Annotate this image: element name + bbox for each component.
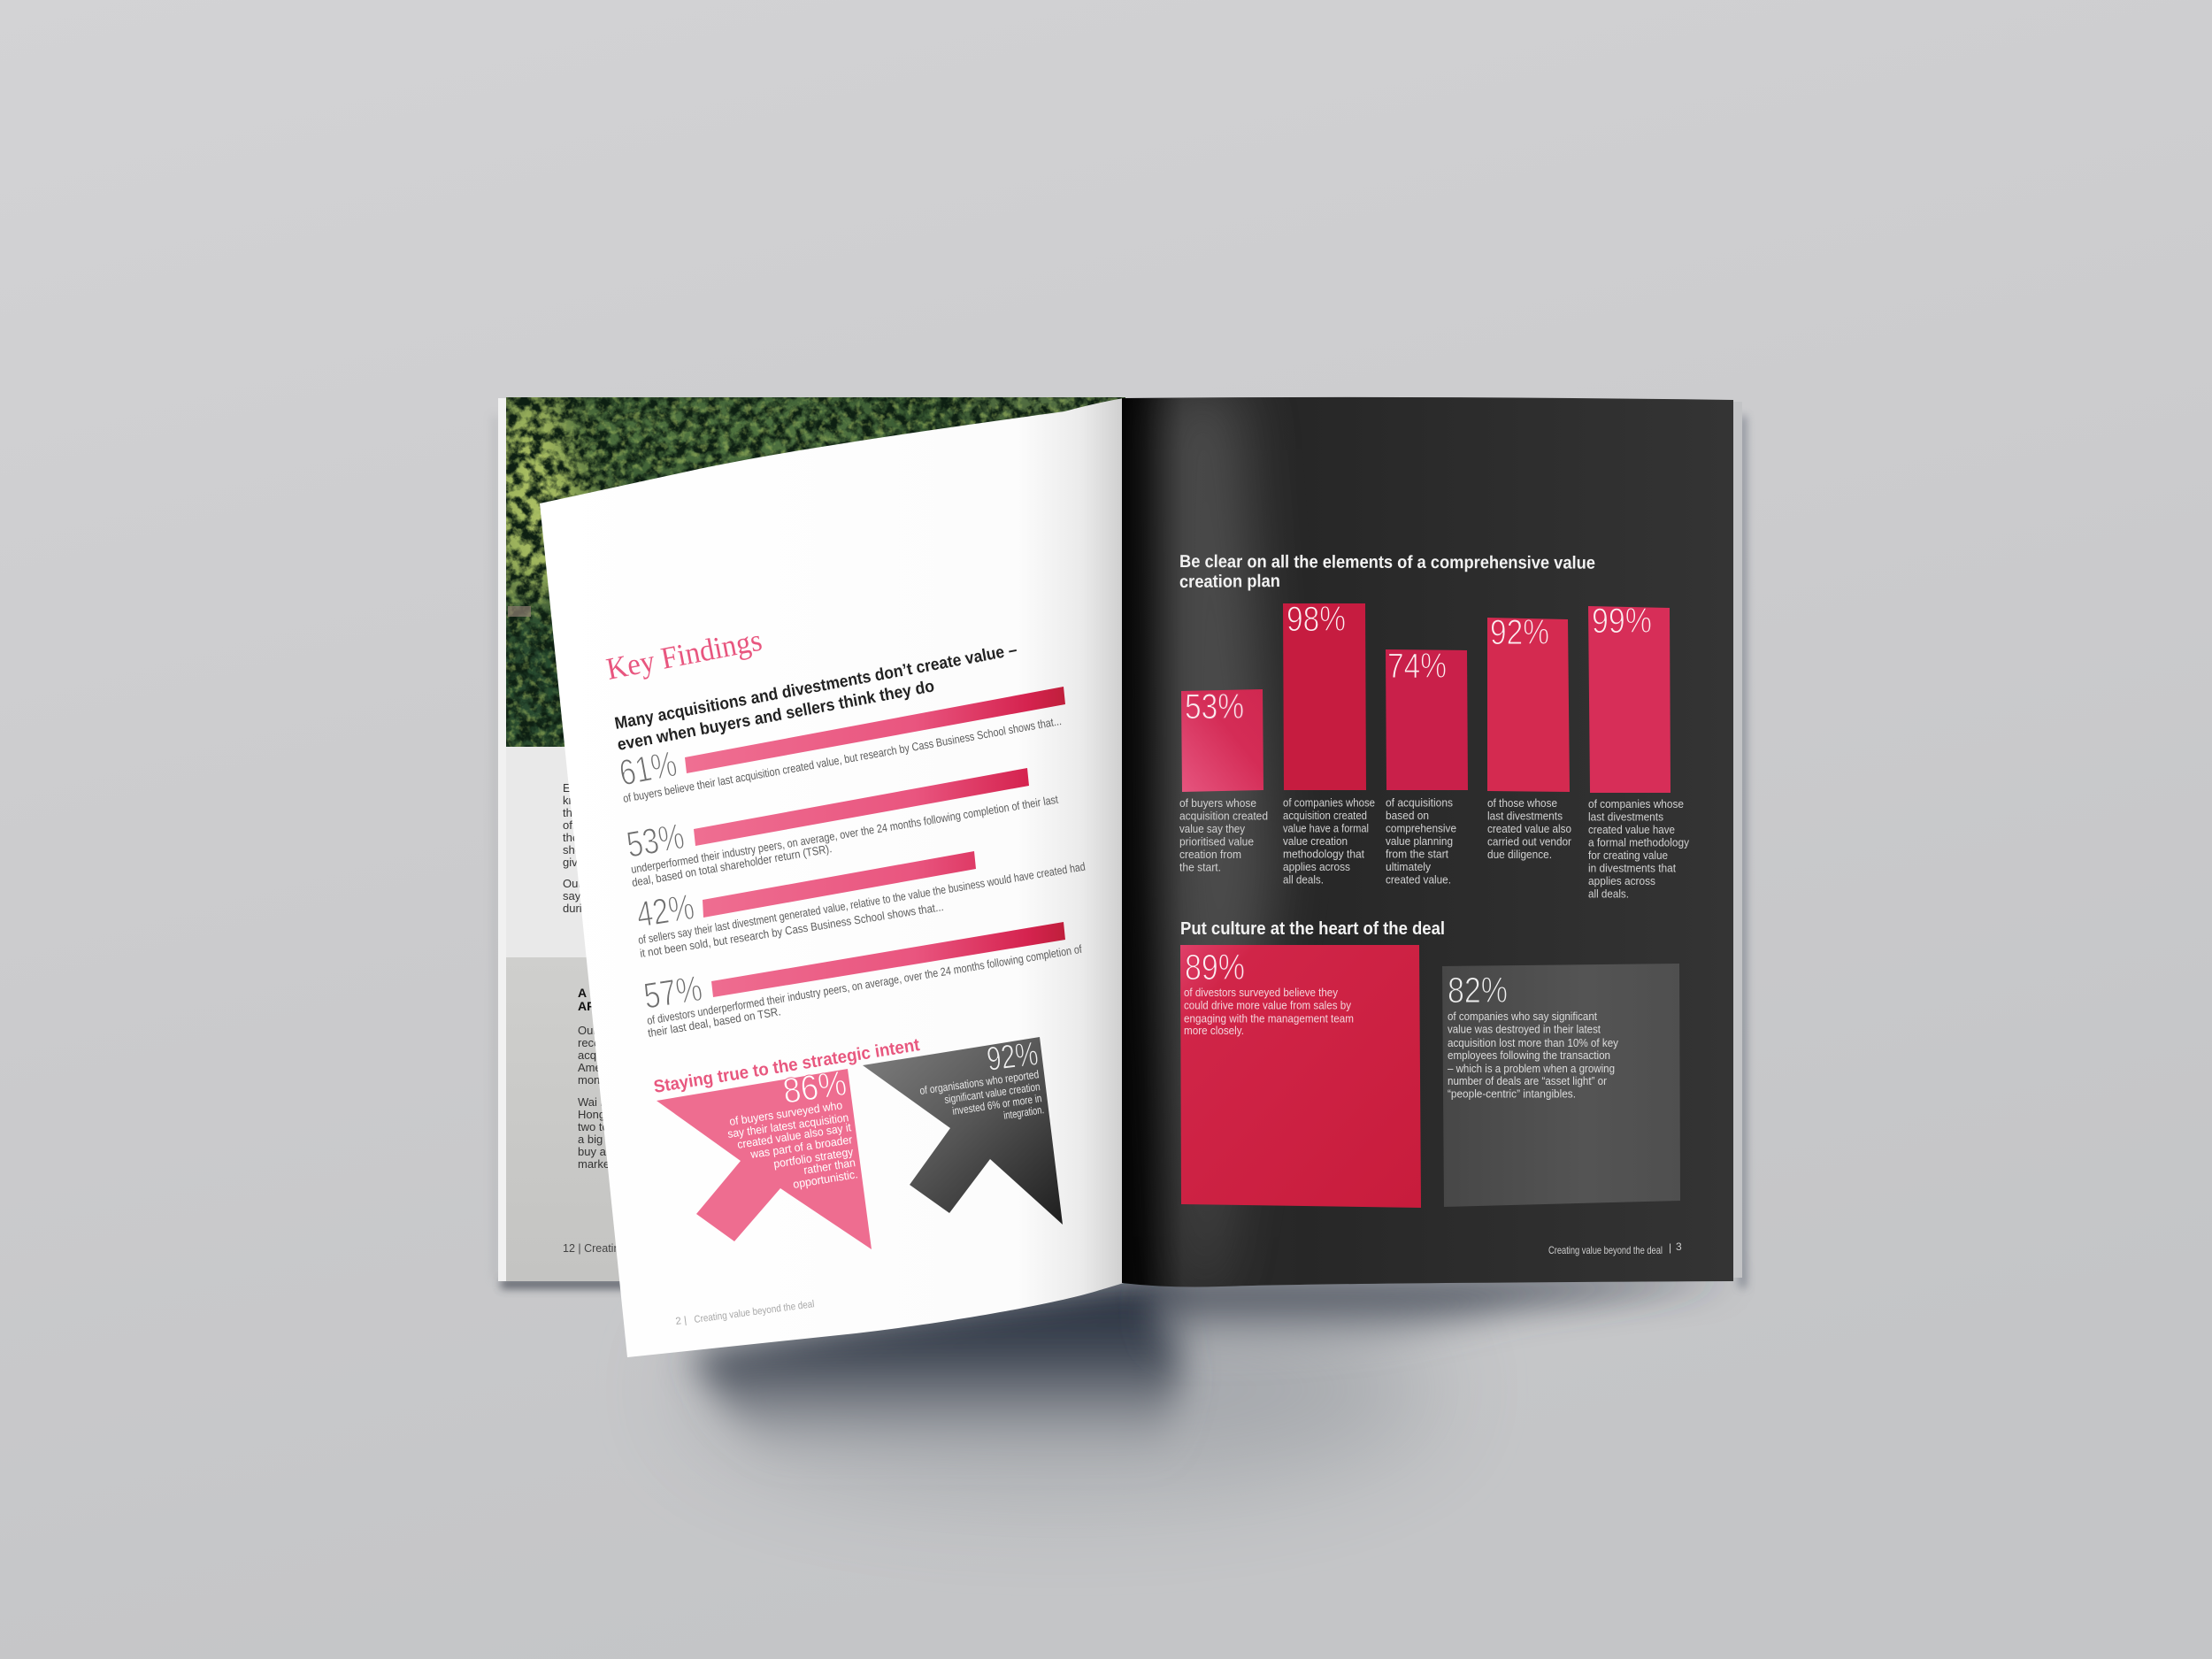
panel: 89%: 89% [1185,947,1245,987]
page sheet [1122,397,1733,1286]
photo: forest [506,397,1125,747]
body text fragments: know [563,794,590,807]
panel: 89%: engaging with the management team [1184,1012,1354,1025]
title: Key Findings: Key Findings [603,623,764,687]
bar: 57% [711,922,1065,997]
bar: 74% [1386,647,1468,790]
bar: 61% [685,687,1065,773]
text: 53% column: of buyers whose [1179,797,1256,810]
body text fragments: that [563,806,582,819]
sidebar text: Our [578,1024,597,1037]
sidebar text: Hong K [578,1108,617,1121]
text: 57% detail: of divestors underperformed their industry peers, on average, over the 24 months following completion of [646,942,1083,1027]
bar: 92% [1487,613,1570,792]
text: 98% column: all deals. [1283,874,1324,887]
body text fragments: givin [563,856,587,869]
page highlight [1164,389,1274,1292]
arrow: dark 92%: invested 6% or more in [951,1092,1042,1118]
panel: 89% [1180,945,1421,1208]
arrow: pink 86%: 86% [780,1064,849,1111]
bar: 42% [703,851,976,918]
stat: 42%: 42% [634,886,697,935]
text: 74% column: value planning [1386,835,1453,848]
book shadow [493,416,1746,1486]
arrow: dark 92%: 92% [985,1035,1041,1079]
text: 98% column: of companies whose [1283,796,1375,809]
text: 92% column: due diligence. [1487,849,1552,861]
body text fragments: Our [563,877,582,890]
bar: 99% [1588,602,1671,793]
bar: 92%: 92% [1490,613,1549,652]
panel: 82%: of companies who say significant [1448,1010,1597,1023]
panel: dark right page [1122,389,1742,1292]
headline: even when buyers and sellers think they do [616,677,936,755]
page footer: 3 [1676,1240,1682,1253]
text: 74% column: of acquisitions [1386,796,1453,809]
back page footer: 12 | Creating value [563,1242,656,1255]
grey sidebar panel [506,957,683,1281]
heading: Be clear: Be clear on all the elements of a comprehensive value [1179,552,1595,573]
body text fragments: offer [563,818,586,832]
text: 53% column: prioritised value [1179,835,1254,848]
text: 53% column: value say they [1179,823,1246,835]
light text panel [506,747,683,957]
heading: Be clear [1179,552,1595,592]
body text fragments: the [563,831,579,844]
text: 53% detail: underperformed their industry peers, on average, over the 24 months following completion of their last [630,793,1059,876]
text: 98% column: acquisition created [1283,810,1367,822]
text: 99% column: last divestments [1588,810,1663,823]
heading: Put culture: Put culture at the heart of the deal [1180,919,1445,939]
sidebar text: a big fa [578,1133,616,1146]
arrow: dark 92%: significant value creation [943,1080,1041,1106]
bar: 74%: 74% [1387,647,1447,686]
stat: 53%: 53% [624,816,687,865]
right page edge [1732,402,1742,1278]
sidebar text: months [578,1073,616,1087]
text: 98% column: methodology that [1283,848,1364,860]
text: 99% column: all deals. [1588,888,1629,901]
text: 92% column: of those whose [1487,797,1557,810]
text: 42% detail [637,860,1087,960]
panel: curled left page [540,398,1124,1357]
sidebar heading: APAC [578,999,612,1013]
sidebar text: recent [578,1036,611,1049]
text: 53% column: the start. [1179,862,1221,874]
headline: Many acquisitions and divestments don’t create value – [613,641,1018,733]
subheading: Staying true: Staying true to the strategic intent [652,1035,921,1097]
text: 98% column: value have a formal [1283,823,1369,835]
sidebar text: two to [578,1120,609,1133]
text: 99% column: of companies whose [1588,798,1684,810]
arrow: dark 92%: integration. [1002,1103,1045,1122]
body text fragments: Every [563,781,593,795]
page edge [498,398,507,1281]
text: 74% column: based on [1386,810,1429,822]
arrow: pink 86%: rather than [803,1156,856,1177]
bar: 53%: 53% [1185,687,1244,726]
sidebar text: acquire [578,1048,616,1062]
bar: 99%: 99% [1592,602,1652,641]
text: 99% column [1588,798,1690,901]
page footer [675,1299,815,1327]
sidebar text: America [578,1061,620,1074]
arrow: dark 92% [863,1035,1063,1225]
heading: Be clear: creation plan [1179,572,1280,592]
text: 42% detail: of sellers say their last divestment generated value, relative to the value the business would have created had [637,860,1087,947]
panel: 82%: number of deals are “asset light” or [1448,1074,1608,1087]
sidebar heading [578,986,620,1013]
bar chart [1181,600,1671,793]
text: 53% column: creation from [1179,849,1241,861]
text: 98% column: applies across [1283,861,1350,873]
sidebar text: Wai Ka [578,1095,615,1109]
text: 53% column: acquisition created [1179,810,1268,823]
arrow: pink 86%: portfolio strategy [772,1145,855,1171]
page sheet [540,398,1124,1357]
panel: 82% [1442,964,1680,1207]
panel: 82%: “people-centric” intangibles. [1448,1087,1576,1101]
text: 99% column: a formal methodology [1588,837,1690,849]
arrow: pink 86%: created value also say it [736,1120,852,1151]
body text fragments [563,781,596,915]
text: 53% detail [630,793,1059,889]
text: 92% column: last divestments [1487,810,1563,823]
text: 53% column [1179,797,1268,874]
text: 74% column [1386,796,1456,887]
arrow: pink 86%: was part of a broader [749,1133,854,1161]
stat: 61%: 61% [616,743,680,794]
text: 99% column: for creating value [1588,849,1668,862]
panel: 82%: acquisition lost more than 10% of key [1448,1036,1618,1049]
arrow: dark 92%: of organisations who reported [918,1068,1040,1097]
text: 98% column [1283,796,1375,887]
text: 53% detail: deal, based on total shareholder return (TSR). [631,841,833,889]
panel: 82%: value was destroyed in their latest [1448,1023,1601,1035]
bar: 53% [694,768,1029,846]
arrow: pink 86%: of buyers surveyed who [728,1098,843,1128]
panel: 82%: 82% [1448,970,1508,1010]
page footer: | [1669,1241,1671,1254]
bar: 98%: 98% [1286,600,1346,639]
text: 74% column: comprehensive [1386,823,1456,835]
text: 99% column: in divestments that [1588,862,1676,874]
text: 92% column: created value also [1487,823,1571,835]
page footer: 2 | [675,1315,687,1327]
sidebar text: markets [578,1157,619,1171]
body text fragments: saying [563,889,596,902]
text: 99% column: created value have [1588,824,1675,836]
text: 98% column: value creation [1283,835,1348,848]
text: 92% column [1487,797,1571,861]
bar: 98% [1283,600,1366,790]
text: 74% column: created value. [1386,874,1451,887]
panel: 89%: could drive more value from sales by [1184,998,1351,1012]
text: 57% detail: their last deal, based on TSR. [647,1004,781,1040]
text: 61% detail: of buyers believe their last acquisition created value, but research by Cass Business School shows that... [622,714,1063,805]
text: 57% detail [646,942,1083,1040]
arrow: pink 86%: opportunistic. [792,1167,859,1191]
sidebar heading: A great [578,986,620,1000]
text: 42% detail: it not been sold, but research by Cass Business School shows that... [639,900,944,960]
arrow: pink 86% [657,1064,872,1249]
bar: 53% [1181,687,1263,792]
text: 74% column: from the start [1386,848,1449,860]
page footer: Creating value beyond the deal [694,1299,815,1325]
panel: 82%: – which is a problem when a growing [1448,1062,1615,1075]
text: 99% column: applies across [1588,875,1655,887]
sidebar text: buy a c [578,1145,615,1158]
body text fragments: shou [563,843,588,856]
panel: 89%: more closely. [1184,1024,1244,1037]
text: 74% column: ultimately [1386,861,1432,873]
text: 92% column: carried out vendor [1487,835,1571,848]
panel: 82%: employees following the transaction [1448,1048,1610,1062]
body text fragments: during [563,902,595,915]
arrow: pink 86%: say their latest acquisition [726,1110,849,1141]
stat: 57%: 57% [641,967,705,1017]
page footer: Creating value beyond the deal [1548,1244,1663,1256]
panel: back left page [482,382,1141,1281]
panel: 89%: of divestors surveyed believe they [1184,986,1338,999]
sidebar text [578,1024,620,1171]
